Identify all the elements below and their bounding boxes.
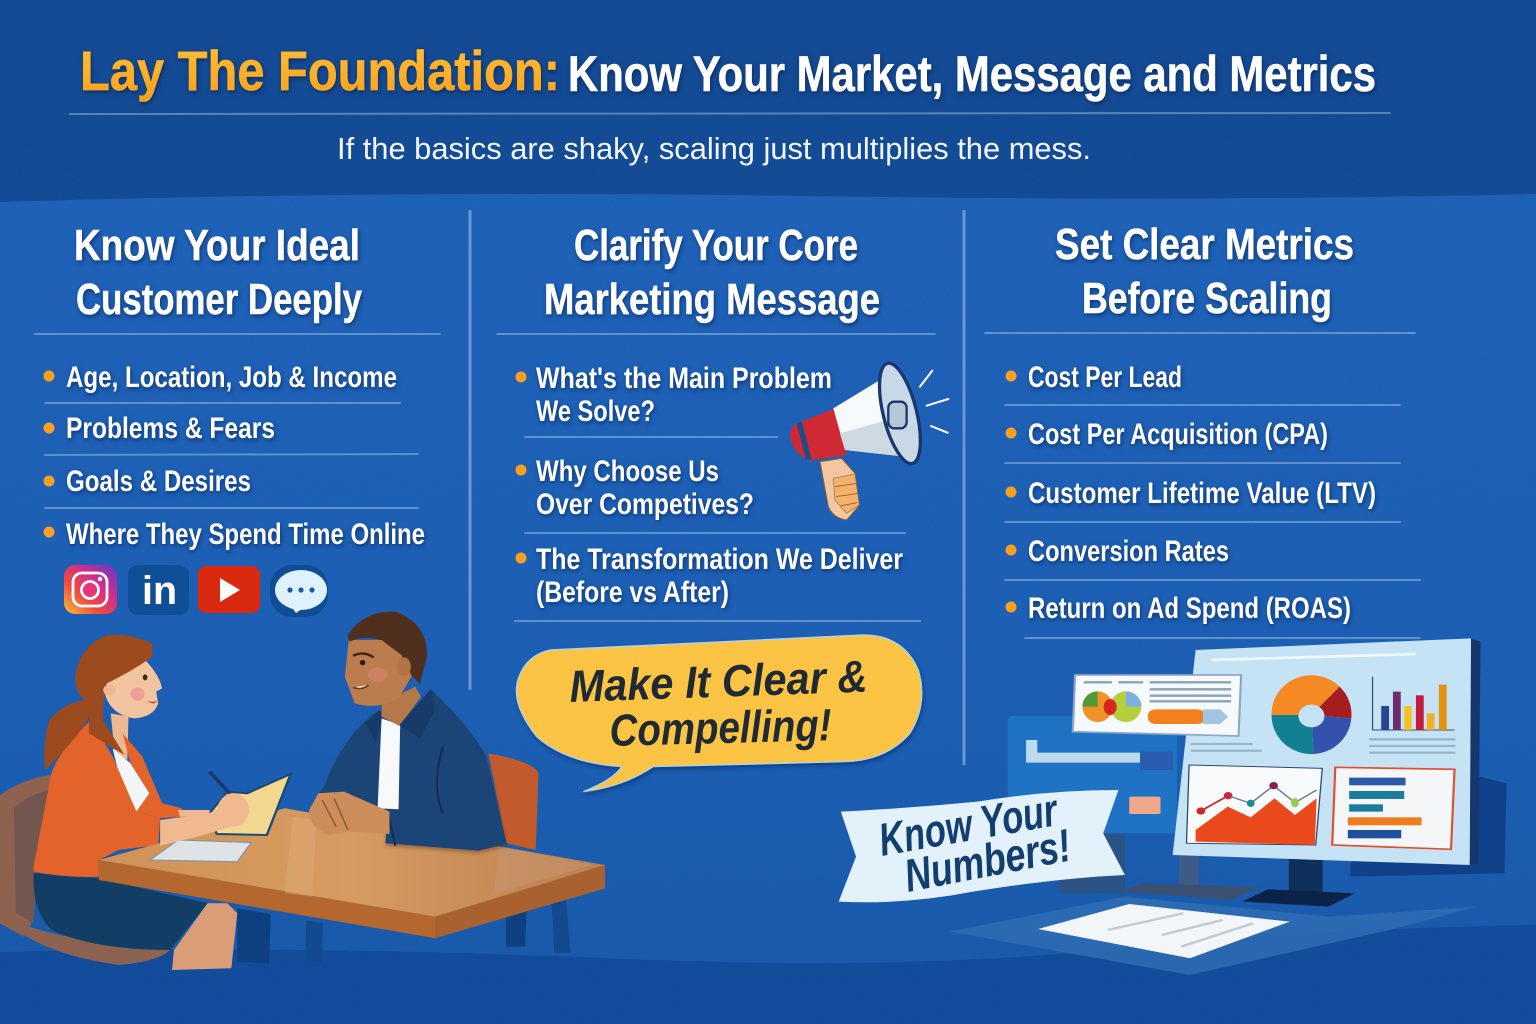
woman's forearm and hand — [160, 793, 249, 846]
monitor stands — [1121, 853, 1355, 907]
list: customer traits: Goals & Desires — [66, 465, 251, 498]
title — [80, 39, 1376, 102]
list: message questions: The Transformation We Deliver — [536, 543, 903, 576]
callout: make it clear — [516, 635, 922, 792]
title: Lay The Foundation: — [80, 39, 560, 102]
panel: know your ideal customer — [35, 221, 440, 617]
pop-up report card — [1073, 675, 1241, 736]
heading: ideal customer: Customer Deeply — [76, 275, 362, 324]
ribbon shape — [839, 790, 1125, 902]
list: message questions: We Solve? — [536, 395, 655, 428]
list: customer traits: Problems & Fears — [66, 412, 275, 445]
heading: metrics: Before Scaling — [1082, 274, 1332, 323]
icon: linkedin — [128, 565, 189, 615]
man's chair — [488, 753, 539, 850]
main monitor — [1173, 638, 1481, 865]
table — [99, 808, 605, 938]
secondary monitor — [1008, 716, 1507, 893]
banner: know your numbers: Numbers! — [900, 819, 1075, 902]
list: customer traits — [44, 361, 425, 551]
banner: know your numbers: Know Your — [875, 783, 1063, 866]
woman's chair — [0, 775, 170, 965]
icon: chat bubble — [270, 565, 328, 617]
list: metrics: Cost Per Acquisition (CPA) — [1028, 418, 1328, 451]
list: metrics: Conversion Rates — [1028, 535, 1229, 568]
list: customer traits: Age, Location, Job & Income — [66, 361, 397, 394]
line and area chart — [1187, 765, 1322, 845]
heading: metrics — [1055, 220, 1354, 323]
heading: marketing message: Marketing Message — [544, 275, 880, 324]
horizontal bars card — [1332, 767, 1455, 849]
table legs — [237, 900, 571, 963]
panel: metrics — [839, 220, 1507, 975]
panel: marketing message — [497, 221, 948, 792]
list: message questions — [515, 362, 920, 621]
list: message questions: (Before vs After) — [536, 576, 729, 609]
heading: ideal customer: Know Your Ideal — [74, 221, 360, 270]
list: customer traits: Where They Spend Time Online — [66, 518, 425, 551]
icon: linkedin: in — [142, 569, 177, 613]
pie chart — [1271, 675, 1352, 754]
banner: know your numbers — [875, 783, 1075, 902]
icon: youtube — [198, 566, 260, 613]
list: metrics: Cost Per Lead — [1028, 361, 1182, 394]
desk papers — [949, 897, 1476, 975]
heading: marketing message: Clarify Your Core — [574, 221, 858, 270]
list: metrics: Return on Ad Spend (ROAS) — [1028, 592, 1351, 625]
list: message questions: What's the Main Problem — [536, 362, 832, 395]
callout: make it clear: Compelling! — [609, 699, 832, 756]
subtitle: If the basics are shaky, scaling just multiplies the mess. — [337, 131, 1091, 166]
woman — [33, 635, 237, 970]
list: metrics — [1005, 361, 1420, 638]
list: metrics: Customer Lifetime Value (LTV) — [1028, 477, 1376, 510]
title: Know Your Market, Message and Metrics — [568, 46, 1376, 102]
illustration: two people meeting at a table — [0, 612, 605, 970]
heading: ideal customer — [74, 221, 362, 324]
notebook and pen — [210, 772, 291, 835]
list: message questions: Why Choose Us — [536, 455, 719, 488]
bar chart — [1373, 677, 1455, 730]
illustration: analytics dashboard — [839, 638, 1507, 975]
callout: make it clear: Make It Clear & — [569, 651, 868, 712]
icon: megaphone — [790, 359, 948, 520]
man — [309, 612, 507, 851]
heading: metrics: Set Clear Metrics — [1055, 220, 1354, 269]
list: message questions: Over Competives? — [536, 488, 754, 521]
heading: marketing message — [544, 221, 880, 324]
icon: instagram — [64, 565, 117, 614]
